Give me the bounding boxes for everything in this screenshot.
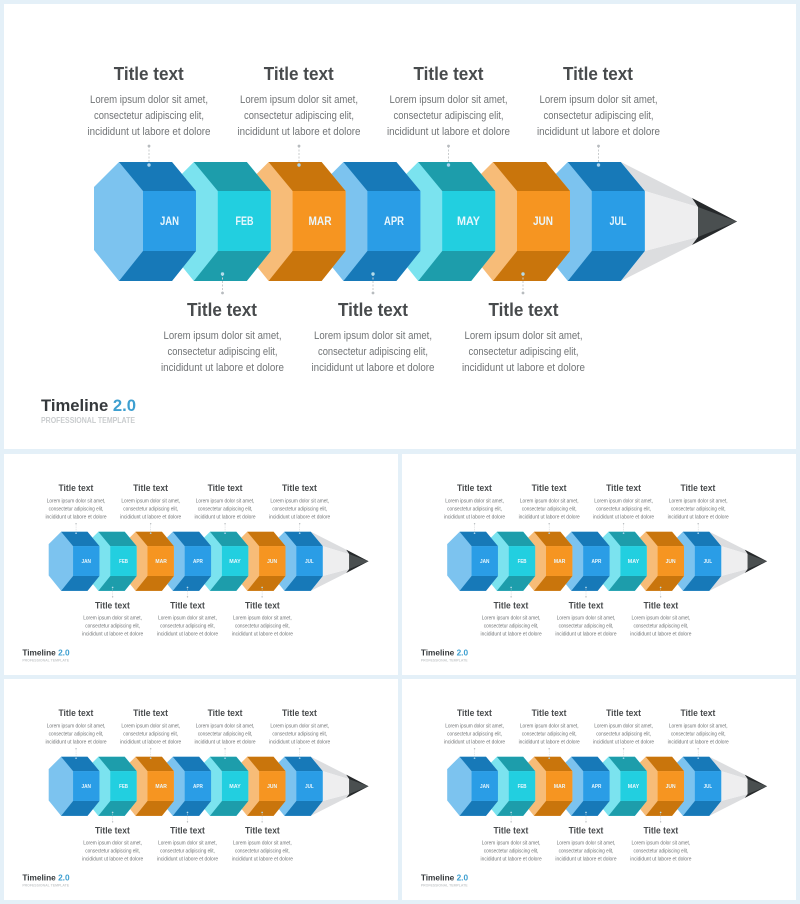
thumbnail slide content: consectetur adipiscing elit,	[123, 506, 178, 512]
thumbnail slide content: Title text	[606, 483, 641, 493]
thumbnail slide content: Title text	[282, 483, 317, 493]
thumbnail slide content	[421, 483, 767, 663]
thumbnail slide content: Lorem ipsum dolor sit amet,	[196, 498, 255, 504]
thumbnail slide content: incididunt ut labore et dolore	[232, 857, 293, 863]
thumbnail slide content: consectetur adipiscing elit,	[198, 731, 253, 737]
text block: bottom 2: Title text	[338, 300, 408, 320]
thumbnail slide content	[421, 708, 767, 888]
text block: top 1: Lorem ipsum dolor sit amet,	[90, 94, 208, 106]
thumbnail slide content: consectetur adipiscing elit,	[522, 506, 577, 512]
thumbnail slide content: Lorem ipsum dolor sit amet,	[47, 723, 106, 729]
thumbnail slide content: consectetur adipiscing elit,	[484, 624, 539, 630]
panel: thumbnail bottom right	[402, 679, 796, 900]
thumbnail slide content: consectetur adipiscing elit,	[596, 731, 651, 737]
thumbnail slide content: Lorem ipsum dolor sit amet,	[47, 498, 106, 504]
text block: top 1: consectetur adipiscing elit,	[94, 110, 204, 122]
footer brand: PROFESSIONAL TEMPLATE	[41, 416, 136, 425]
text block: bottom 2	[312, 300, 434, 374]
thumbnail slide content: Lorem ipsum dolor sit amet,	[632, 616, 691, 622]
thumbnail slide content: Title text	[606, 708, 641, 718]
text block: top 4: Title text	[563, 64, 633, 84]
text block: bottom 1: consectetur adipiscing elit,	[168, 346, 278, 358]
thumbnail slide content: Lorem ipsum dolor sit amet,	[158, 616, 217, 622]
thumbnail slide content: Title text	[58, 483, 93, 493]
thumbnail slide content: Title text	[58, 708, 93, 718]
thumbnail slide content: PROFESSIONAL TEMPLATE	[22, 658, 69, 663]
text block: top 3: Lorem ipsum dolor sit amet,	[390, 94, 508, 106]
thumbnail slide content: JAN	[82, 559, 91, 565]
thumbnail slide content: Lorem ipsum dolor sit amet,	[482, 841, 541, 847]
text block: top 3: Title text	[414, 64, 484, 84]
thumbnail slide content: FEB	[518, 559, 527, 565]
pencil timeline: MAY	[457, 216, 480, 228]
text block: top 4	[537, 64, 660, 138]
thumbnail slide content: Title text	[133, 483, 168, 493]
text block: bottom 3: Title text	[488, 300, 559, 320]
thumbnail slide content: Lorem ipsum dolor sit amet,	[445, 723, 504, 729]
thumbnail slide content: incididunt ut labore et dolore	[194, 514, 256, 520]
pencil timeline: JAN	[160, 216, 179, 228]
thumbnail slide content: consectetur adipiscing elit,	[634, 849, 689, 855]
thumbnail slide content: Timeline 2.0	[22, 873, 70, 883]
thumbnail slide content: consectetur adipiscing elit,	[559, 624, 614, 630]
thumbnail slide content: consectetur adipiscing elit,	[85, 849, 140, 855]
text block: bottom 3	[462, 300, 585, 374]
text block: bottom 2: consectetur adipiscing elit,	[318, 346, 428, 358]
thumbnail slide content: Lorem ipsum dolor sit amet,	[121, 498, 180, 504]
thumbnail slide content: Title text	[457, 483, 492, 493]
thumbnail slide content: Title text	[681, 483, 715, 493]
thumbnail slide content: Lorem ipsum dolor sit amet,	[270, 723, 329, 729]
thumbnail slide content: APR	[591, 784, 602, 790]
thumbnail slide content: JAN	[480, 559, 489, 565]
text block: bottom 1: incididunt ut labore et dolore	[161, 362, 284, 374]
thumbnail slide content: Lorem ipsum dolor sit amet,	[83, 841, 142, 847]
thumbnail slide content: Lorem ipsum dolor sit amet,	[270, 498, 329, 504]
thumbnail slide content: Title text	[493, 825, 528, 835]
thumbnail slide content: incididunt ut labore et dolore	[120, 739, 181, 745]
thumbnail slide content: FEB	[119, 784, 128, 790]
thumbnail slide content: MAR	[155, 559, 168, 565]
thumbnail slide content: incididunt ut labore et dolore	[157, 632, 218, 638]
thumbnail slide content	[22, 483, 369, 663]
thumbnail slide content: MAY	[628, 784, 639, 790]
text block: top 3: consectetur adipiscing elit,	[394, 110, 504, 122]
thumbnail slide content: Title text	[95, 600, 130, 610]
thumbnail slide content: MAR	[554, 559, 566, 565]
panel: thumbnail top left	[4, 454, 398, 675]
text block: bottom 2: incididunt ut labore et dolore	[312, 362, 434, 374]
thumbnail slide content: incididunt ut labore et dolore	[630, 857, 691, 863]
thumbnail slide content: Lorem ipsum dolor sit amet,	[632, 841, 691, 847]
thumbnail slide content: JUL	[704, 784, 713, 790]
thumbnail slide content: JAN	[480, 784, 489, 790]
pencil timeline: APR	[384, 216, 405, 228]
thumbnail slide content: Lorem ipsum dolor sit amet,	[557, 841, 616, 847]
text block: top 3	[387, 64, 510, 138]
thumbnail slide content: Title text	[208, 708, 242, 718]
text block: top 1: Title text	[114, 64, 184, 84]
thumbnail slide content: consectetur adipiscing elit,	[272, 506, 327, 512]
thumbnail slide content: incididunt ut labore et dolore	[481, 632, 542, 638]
thumbnail slide content: incididunt ut labore et dolore	[555, 632, 617, 638]
pencil timeline: JUN	[533, 216, 553, 228]
thumbnail slide content: incididunt ut labore et dolore	[120, 514, 181, 520]
thumbnail slide content: incididunt ut labore et dolore	[593, 739, 654, 745]
thumbnail slide content: JUN	[267, 559, 277, 565]
text block: bottom 3: incididunt ut labore et dolore	[462, 362, 585, 374]
text block: top 4: consectetur adipiscing elit,	[544, 110, 654, 122]
thumbnail slide content: consectetur adipiscing elit,	[671, 506, 726, 512]
thumbnail slide content: incididunt ut labore et dolore	[519, 739, 580, 745]
thumbnail slide content: Lorem ipsum dolor sit amet,	[669, 498, 728, 504]
thumbnail slide content: incididunt ut labore et dolore	[555, 857, 617, 863]
thumbnail slide content: FEB	[119, 559, 128, 565]
thumbnail slide content: JUL	[305, 559, 314, 565]
text block: top 4: incididunt ut labore et dolore	[537, 126, 660, 138]
text block: bottom 3: consectetur adipiscing elit,	[468, 346, 578, 358]
thumbnail slide content: Lorem ipsum dolor sit amet,	[158, 841, 217, 847]
thumbnail slide content: incididunt ut labore et dolore	[593, 514, 654, 520]
thumbnail slide content: consectetur adipiscing elit,	[272, 731, 327, 737]
thumbnail slide content: Lorem ipsum dolor sit amet,	[233, 841, 292, 847]
text block: top 1	[88, 64, 210, 138]
thumbnail slide content: consectetur adipiscing elit,	[123, 731, 178, 737]
thumbnail slide content: consectetur adipiscing elit,	[484, 849, 539, 855]
thumbnail slide content: consectetur adipiscing elit,	[160, 624, 215, 630]
thumbnail slide content: Title text	[133, 708, 168, 718]
text block: bottom 1: Lorem ipsum dolor sit amet,	[164, 330, 282, 342]
thumbnail slide content: Lorem ipsum dolor sit amet,	[594, 723, 653, 729]
thumbnail slide content: Title text	[569, 600, 603, 610]
text block: top 2: incididunt ut labore et dolore	[238, 126, 360, 138]
thumbnail slide content: Lorem ipsum dolor sit amet,	[594, 498, 653, 504]
thumbnail slide content: Lorem ipsum dolor sit amet,	[669, 723, 728, 729]
thumbnail slide content: consectetur adipiscing elit,	[522, 731, 577, 737]
thumbnail slide content: MAY	[229, 784, 241, 790]
thumbnail slide content: consectetur adipiscing elit,	[596, 506, 651, 512]
text block: bottom 1	[161, 300, 284, 374]
thumbnail slide content: incididunt ut labore et dolore	[82, 632, 143, 638]
text block: bottom 3: Lorem ipsum dolor sit amet,	[464, 330, 582, 342]
thumbnail slide content: MAY	[628, 559, 639, 565]
thumbnail slide content: APR	[193, 784, 204, 790]
thumbnail slide content: consectetur adipiscing elit,	[160, 849, 215, 855]
thumbnail slide content: incididunt ut labore et dolore	[157, 857, 218, 863]
thumbnail slide content: Title text	[532, 708, 566, 718]
pencil timeline	[94, 145, 737, 294]
thumbnail slide content: incididunt ut labore et dolore	[519, 514, 580, 520]
pencil timeline: FEB	[236, 216, 254, 228]
thumbnail slide content: consectetur adipiscing elit,	[198, 506, 253, 512]
thumbnail slide content: incididunt ut labore et dolore	[444, 514, 505, 520]
thumbnail slide content: Lorem ipsum dolor sit amet,	[121, 723, 180, 729]
thumbnail slide content: consectetur adipiscing elit,	[235, 624, 290, 630]
thumbnail slide content: consectetur adipiscing elit,	[634, 624, 689, 630]
thumbnail slide content: Lorem ipsum dolor sit amet,	[520, 498, 579, 504]
thumbnail slide content: Title text	[245, 600, 280, 610]
footer brand: Timeline 2.0	[41, 396, 136, 415]
footer brand	[41, 396, 136, 425]
thumbnail slide content: MAY	[229, 559, 241, 565]
thumbnail slide content: Lorem ipsum dolor sit amet,	[520, 723, 579, 729]
thumbnail slide content: Title text	[95, 825, 130, 835]
thumbnail slide content: JUL	[704, 559, 713, 565]
panel: thumbnail bottom left	[4, 679, 398, 900]
thumbnail slide content: Title text	[457, 708, 492, 718]
text block: top 2: Title text	[264, 64, 334, 84]
thumbnail slide content: PROFESSIONAL TEMPLATE	[421, 883, 468, 888]
thumbnail slide content: APR	[193, 559, 204, 565]
thumbnail slide content: JUN	[666, 784, 676, 790]
thumbnail slide content: MAR	[554, 784, 566, 790]
text block: top 3: incididunt ut labore et dolore	[387, 126, 510, 138]
thumbnail slide content: Title text	[643, 825, 678, 835]
thumbnail slide content: Lorem ipsum dolor sit amet,	[557, 616, 616, 622]
thumbnail slide content: incididunt ut labore et dolore	[45, 514, 107, 520]
thumbnail slide content: Timeline 2.0	[421, 873, 468, 883]
thumbnail slide content: Lorem ipsum dolor sit amet,	[445, 498, 504, 504]
thumbnail slide content: incididunt ut labore et dolore	[668, 739, 729, 745]
thumbnail slide content: APR	[591, 559, 602, 565]
thumbnail slide content: Title text	[170, 600, 205, 610]
pencil timeline: MAR	[308, 216, 332, 228]
thumbnail slide content: consectetur adipiscing elit,	[85, 624, 140, 630]
thumbnail slide content: incididunt ut labore et dolore	[45, 739, 107, 745]
thumbnail slide content: consectetur adipiscing elit,	[49, 731, 104, 737]
thumbnail slide content: Title text	[493, 600, 528, 610]
thumbnail slide content: Lorem ipsum dolor sit amet,	[233, 616, 292, 622]
thumbnail slide content: Title text	[245, 825, 280, 835]
thumbnail slide content: incididunt ut labore et dolore	[481, 857, 542, 863]
thumbnail slide content: incididunt ut labore et dolore	[444, 739, 505, 745]
thumbnail slide content: consectetur adipiscing elit,	[559, 849, 614, 855]
thumbnail slide content: Timeline 2.0	[22, 648, 70, 658]
thumbnail slide content: consectetur adipiscing elit,	[447, 731, 502, 737]
thumbnail slide content: incididunt ut labore et dolore	[232, 632, 293, 638]
thumbnail slide content: consectetur adipiscing elit,	[49, 506, 104, 512]
thumbnail slide content: FEB	[518, 784, 527, 790]
thumbnail slide content: Timeline 2.0	[421, 648, 468, 658]
thumbnail slide content: Title text	[532, 483, 566, 493]
panel: main slide	[4, 4, 796, 449]
thumbnail slide content: Title text	[282, 708, 317, 718]
thumbnail slide content: incididunt ut labore et dolore	[82, 857, 143, 863]
thumbnail slide content: JUN	[666, 559, 676, 565]
pencil timeline: JUL	[610, 216, 626, 228]
thumbnail slide content: Title text	[643, 600, 678, 610]
thumbnail slide content: JUL	[305, 784, 314, 790]
thumbnail slide content: Title text	[170, 825, 205, 835]
thumbnail slide content: incididunt ut labore et dolore	[194, 739, 256, 745]
text block: top 4: Lorem ipsum dolor sit amet,	[540, 94, 658, 106]
thumbnail slide content: JUN	[267, 784, 277, 790]
thumbnail slide content: Lorem ipsum dolor sit amet,	[83, 616, 142, 622]
thumbnail slide content: consectetur adipiscing elit,	[447, 506, 502, 512]
text block: bottom 1: Title text	[187, 300, 257, 320]
thumbnail slide content: consectetur adipiscing elit,	[671, 731, 726, 737]
thumbnail slide content	[22, 708, 369, 888]
text block: top 2: consectetur adipiscing elit,	[244, 110, 354, 122]
thumbnail slide content: JAN	[82, 784, 91, 790]
thumbnail slide content: PROFESSIONAL TEMPLATE	[22, 883, 69, 888]
thumbnail slide content: incididunt ut labore et dolore	[269, 514, 330, 520]
thumbnail slide content: Title text	[569, 825, 603, 835]
thumbnail slide content: Lorem ipsum dolor sit amet,	[482, 616, 541, 622]
thumbnail slide content: incididunt ut labore et dolore	[269, 739, 330, 745]
text block: top 1: incididunt ut labore et dolore	[88, 126, 210, 138]
thumbnail slide content: Lorem ipsum dolor sit amet,	[196, 723, 255, 729]
thumbnail slide content: MAR	[155, 784, 168, 790]
text block: top 2	[238, 64, 360, 138]
text block: bottom 2: Lorem ipsum dolor sit amet,	[314, 330, 432, 342]
thumbnail slide content: consectetur adipiscing elit,	[235, 849, 290, 855]
thumbnail slide content: incididunt ut labore et dolore	[668, 514, 729, 520]
thumbnail slide content: Title text	[208, 483, 242, 493]
thumbnail slide content: Title text	[681, 708, 715, 718]
thumbnail slide content: PROFESSIONAL TEMPLATE	[421, 658, 468, 663]
panel: thumbnail top right	[402, 454, 796, 675]
thumbnail slide content: incididunt ut labore et dolore	[630, 632, 691, 638]
text block: top 2: Lorem ipsum dolor sit amet,	[240, 94, 358, 106]
